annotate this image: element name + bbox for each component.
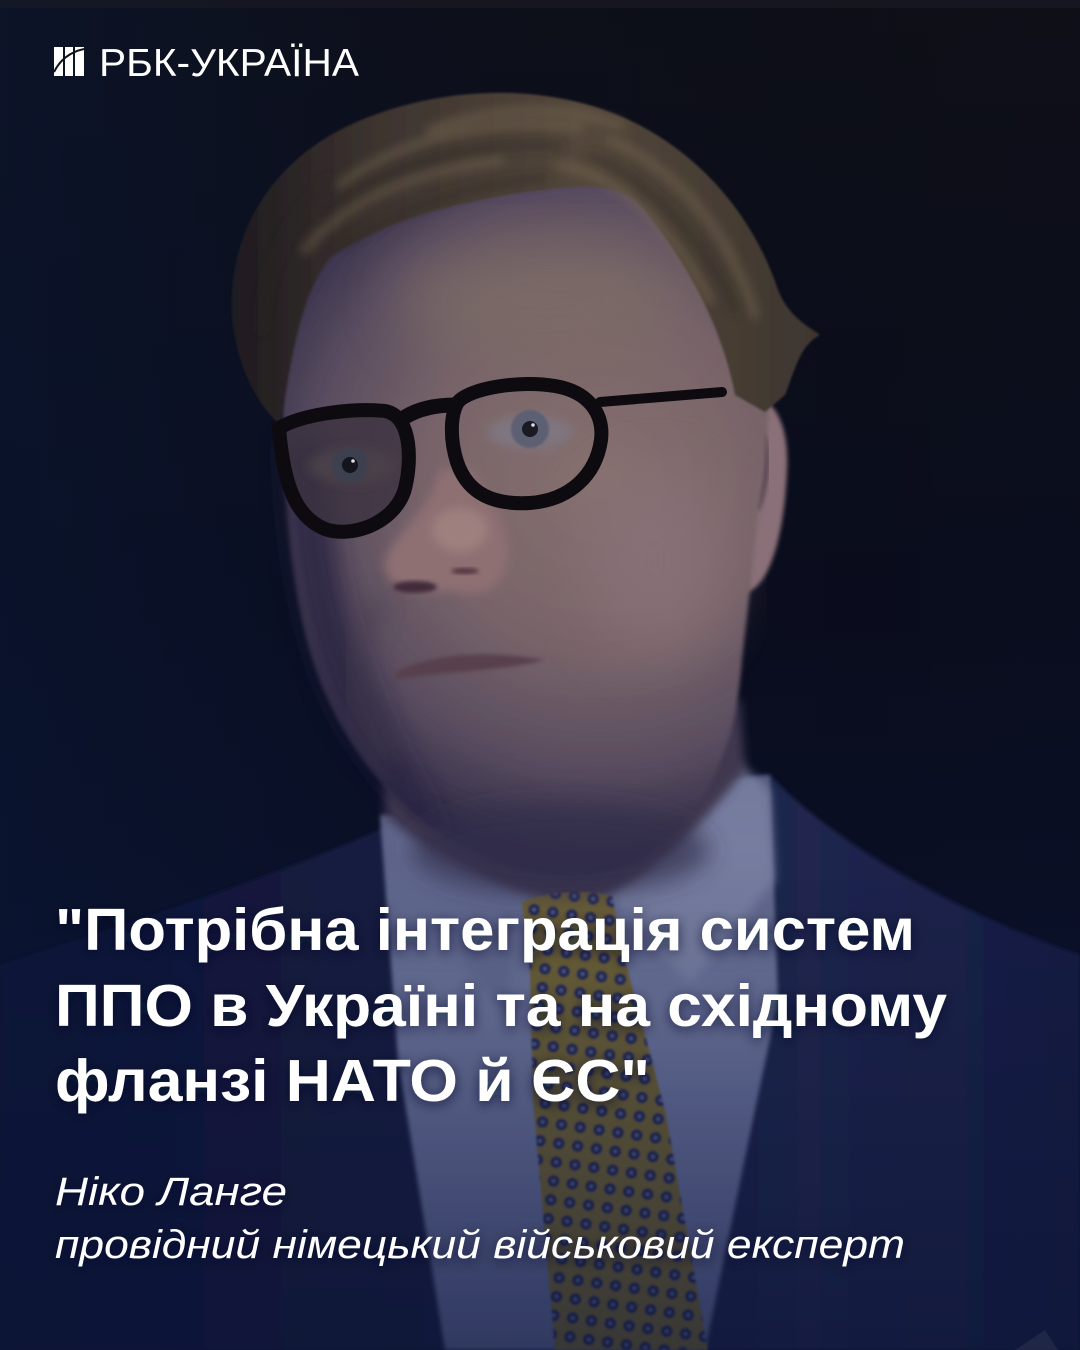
headline quote: "Потрібна інтеграція систем bbox=[55, 897, 915, 963]
right collar bbox=[610, 760, 775, 985]
left eye bbox=[308, 448, 396, 484]
icon: RBC logo mark bbox=[54, 47, 84, 76]
chin shadow bbox=[410, 805, 710, 895]
tie bbox=[522, 892, 708, 1350]
face side shadow bbox=[284, 440, 450, 840]
speaker name: Ніко Ланге bbox=[55, 1170, 287, 1214]
nasolabial shadow bbox=[357, 600, 395, 760]
left collar bbox=[385, 825, 525, 1010]
bottom fade overlay bbox=[0, 850, 1080, 1350]
face bbox=[282, 160, 770, 876]
headline quote: ППО в Україні та на східному bbox=[55, 973, 947, 1039]
nose highlight bbox=[432, 508, 488, 552]
ear shadow bbox=[752, 420, 766, 510]
hair bbox=[232, 93, 820, 425]
nostril bbox=[393, 581, 437, 593]
hair strands bbox=[262, 111, 755, 330]
headline quote: фланзі НАТО й ЄС" bbox=[55, 1048, 650, 1114]
neck bbox=[385, 700, 745, 905]
headline quote bbox=[55, 897, 947, 1114]
right eye bbox=[488, 415, 572, 449]
ear bbox=[722, 396, 787, 592]
mouth bbox=[395, 654, 545, 680]
nose bbox=[385, 470, 508, 594]
logo bbox=[54, 42, 359, 85]
left lens shade bbox=[278, 407, 408, 533]
glasses bbox=[279, 384, 722, 532]
wordmark: РБК-УКРАЇНА bbox=[99, 42, 359, 85]
speaker role: провідний німецький військовий експерт bbox=[55, 1223, 905, 1267]
cheek highlight bbox=[585, 470, 725, 650]
top edge strip bbox=[0, 0, 1080, 8]
shirt bbox=[380, 775, 778, 1350]
forehead highlight bbox=[400, 240, 680, 360]
jacket bbox=[0, 775, 1080, 1350]
pocket square bbox=[1015, 1330, 1058, 1350]
